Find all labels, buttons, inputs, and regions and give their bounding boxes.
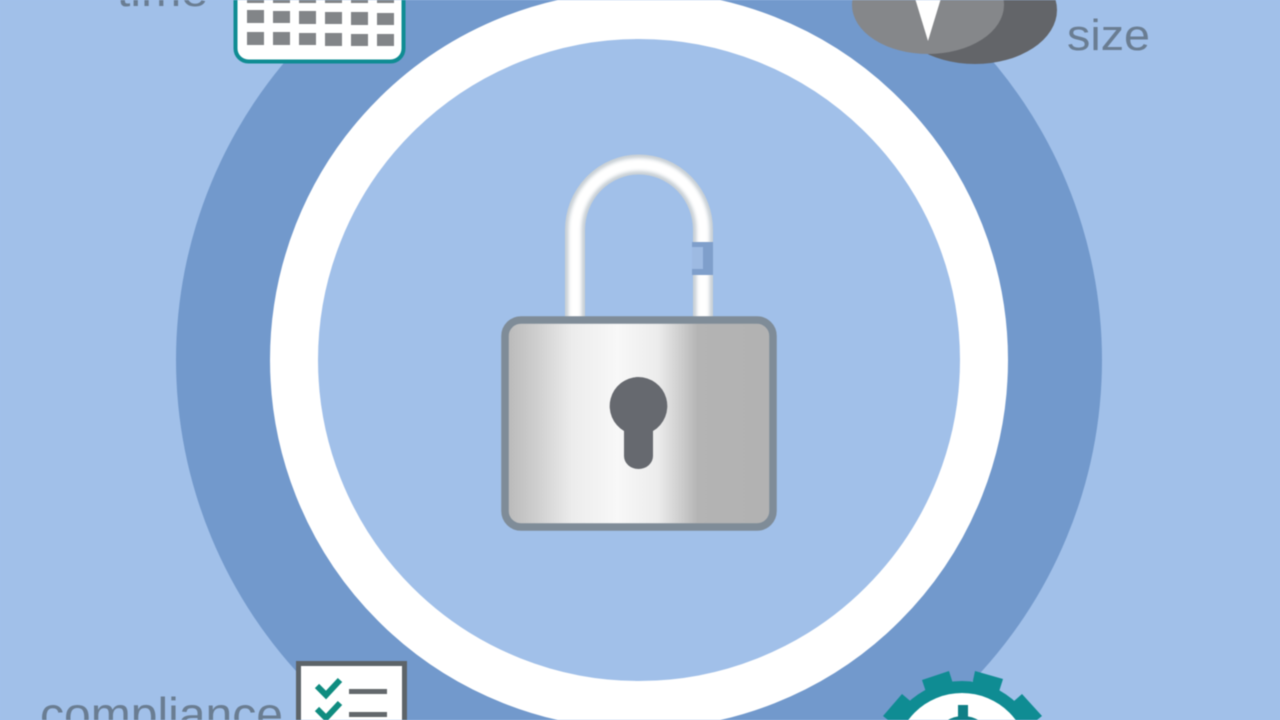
suit shadow shoulder <box>893 0 1057 64</box>
padlock keyhole <box>610 377 667 469</box>
stopwatch <box>933 705 993 720</box>
label: size: size <box>1067 11 1150 60</box>
icon: gear with stopwatch <box>883 671 1042 720</box>
padlock shackle <box>575 164 713 320</box>
outer dark blue circle <box>176 0 1102 720</box>
checklist line 1 <box>349 689 387 694</box>
gear teeth <box>883 671 1042 720</box>
suit shirt <box>914 0 942 41</box>
check mark 1 <box>317 680 340 695</box>
check mark 2 <box>317 703 340 718</box>
icon: open padlock <box>505 164 773 527</box>
icon: calendar <box>236 0 404 62</box>
padlock body <box>505 320 773 527</box>
checklist line 2 <box>349 712 387 717</box>
suit front <box>852 0 1004 54</box>
white ring <box>294 15 984 705</box>
gear face <box>895 693 1029 720</box>
icon: suit bust <box>852 0 1057 64</box>
icon: checklist <box>298 664 404 720</box>
